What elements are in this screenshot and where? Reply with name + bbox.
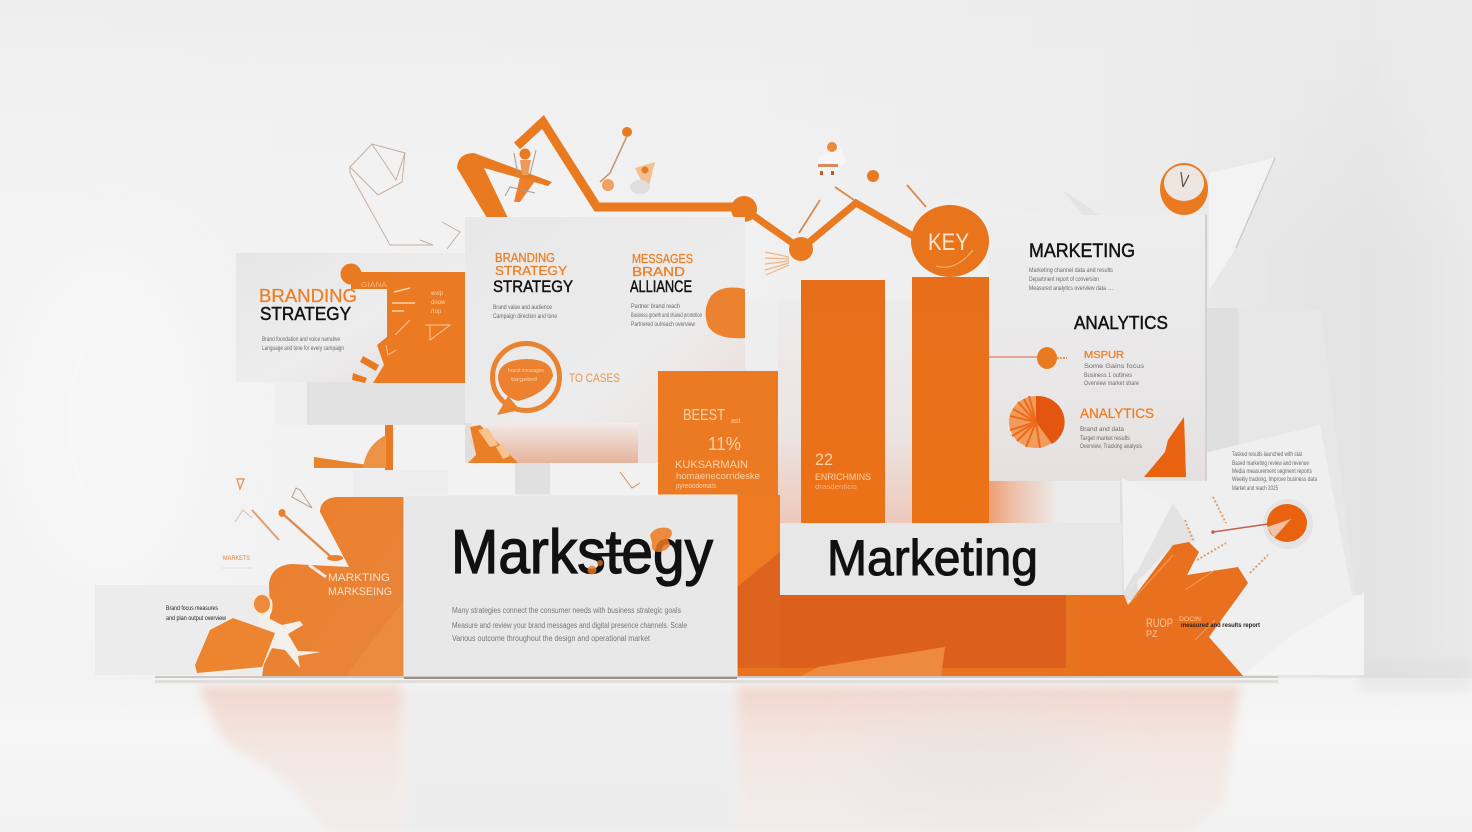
white and grey folded shapes behind arrow bbox=[1122, 478, 1197, 592]
shelf with ribbon bbox=[465, 423, 638, 463]
marketing strategy card bbox=[404, 495, 737, 677]
heading: strategy: STRATEGY bbox=[260, 304, 351, 324]
panel: center strategy card bbox=[465, 217, 745, 463]
panel: branding strategy bbox=[236, 253, 465, 383]
marketing banner: Marketing bbox=[827, 530, 1038, 586]
label: to cases: TO CASES bbox=[569, 373, 620, 385]
orange stat card: BEEST bbox=[683, 407, 725, 424]
panel: marketing analytics: Department report of conversion bbox=[1029, 277, 1099, 283]
panel: center strategy card: Business growth and shared promotion bbox=[631, 313, 702, 319]
marketing strategy card: Measure and review your brand messages and digital presence channels. Scale bbox=[452, 621, 687, 630]
big orange line chart arrow bbox=[457, 122, 915, 249]
orange left figure block: MARKSEING bbox=[328, 586, 392, 598]
soft orange glow beside bars bbox=[988, 478, 1058, 528]
floor with reflections bbox=[0, 660, 1472, 832]
panel: marketing analytics: Target market results bbox=[1080, 436, 1130, 442]
panel: center strategy card: Partnered outreach overview bbox=[631, 322, 696, 328]
panel: center strategy card: ALLIANCE bbox=[630, 278, 692, 296]
left white card with copy bbox=[95, 585, 275, 675]
left white card with copy: and plan output overview bbox=[166, 616, 227, 622]
panel: marketing analytics: Overview, Tracking analysis bbox=[1080, 444, 1142, 450]
white paper sheet copy, right: Weekly tracking, Improve business data bbox=[1232, 477, 1318, 483]
block caption: MARKTING bbox=[328, 572, 390, 584]
figure silhouette bbox=[197, 594, 321, 675]
panel: center strategy card: STRATEGY bbox=[493, 278, 573, 296]
pale column between bars bbox=[778, 300, 912, 525]
heading: marketing: MARKETING bbox=[1029, 241, 1135, 262]
white pedestal blocks bbox=[275, 382, 640, 497]
magnifier badge: targeted bbox=[511, 377, 537, 383]
sub heading: analytics: ANALYTICS bbox=[1080, 406, 1154, 421]
orange arrow shape, lower right: DOCIN bbox=[1179, 617, 1201, 623]
orange blob bbox=[706, 288, 745, 338]
orange stat card: ast bbox=[731, 418, 740, 425]
orange arrow shape, lower right: PZ bbox=[1146, 629, 1158, 639]
panel: center strategy card: Brand value and audience bbox=[493, 305, 553, 311]
panel: marketing analytics: Measured analytics overview data .... bbox=[1029, 286, 1113, 292]
marketing strategy card: Various outcome throughout the design and operational market bbox=[452, 634, 651, 643]
white paper sheet copy, right: Media measurement segment reports bbox=[1232, 469, 1312, 475]
marketing banner bbox=[780, 523, 1122, 595]
orange pole and base under branding panel bbox=[314, 380, 465, 470]
heading: branding strategy: BRANDING bbox=[495, 250, 555, 265]
white paper sheet copy, right bbox=[1232, 452, 1318, 492]
panel: center strategy card: Partner brand reach bbox=[631, 304, 680, 310]
orange left figure block bbox=[195, 497, 404, 677]
orange base block bbox=[737, 495, 1079, 677]
orange illustration side panel bbox=[340, 264, 465, 383]
connector node bbox=[988, 347, 1067, 369]
big heading: Markstegy bbox=[451, 518, 713, 587]
small tag card: MARKETS bbox=[223, 556, 250, 562]
bar chart bbox=[801, 277, 989, 525]
panel: center strategy card: STRATEGY bbox=[495, 263, 567, 278]
gauge dial bbox=[1211, 499, 1313, 549]
orange triangle bbox=[1144, 417, 1186, 477]
small tag card bbox=[216, 540, 256, 577]
panel: marketing analytics: Marketing channel data and results bbox=[1029, 268, 1113, 274]
panel: marketing analytics: Overview market share bbox=[1084, 381, 1140, 387]
white paper sheet copy, right: Tasked results launched with stat bbox=[1232, 452, 1302, 458]
orange stat card: KUKSARMAIN bbox=[675, 459, 748, 471]
orange stat card: 11% bbox=[708, 434, 741, 454]
bar 1 bbox=[801, 280, 885, 525]
panel: branding strategy: Language and tone for every campaign bbox=[262, 346, 344, 352]
panel: marketing analytics: Business 1 outlines bbox=[1084, 373, 1132, 379]
thin line sketch, upper left bbox=[350, 144, 460, 249]
heading: branding: BRANDING bbox=[259, 286, 357, 306]
white paper sheet copy, right: Based marketing review and revenue bbox=[1232, 461, 1310, 467]
orange stat card bbox=[658, 371, 778, 511]
panel: center strategy card: Campaign direction and tone bbox=[493, 314, 558, 320]
bar 2 bbox=[912, 277, 989, 525]
orange illustration side panel: dnow bbox=[431, 300, 446, 306]
small pins and sticks, lower left bbox=[235, 479, 343, 577]
white paper sheet copy, right: Market and reach 2025 bbox=[1232, 486, 1278, 492]
heading: message alliance: MESSAGES bbox=[632, 251, 693, 266]
line chart node circles bbox=[731, 170, 879, 261]
orange arrow shape, lower right: measured and results report bbox=[1181, 623, 1260, 629]
clock icon bbox=[1160, 163, 1208, 215]
heading: analytics: ANALYTICS bbox=[1074, 313, 1168, 333]
orange stat card: pyreoodomais bbox=[676, 483, 716, 490]
panel: marketing analytics: Some Gains focus bbox=[1084, 364, 1144, 370]
block caption: RUOP bbox=[1146, 616, 1173, 630]
key badge: KEY bbox=[928, 229, 969, 256]
panel: center strategy card: BRAND bbox=[632, 264, 685, 279]
floor shelf line bbox=[155, 676, 1278, 683]
orange stat card: homaenecorrideske bbox=[676, 471, 760, 481]
key badge bbox=[911, 205, 989, 277]
magnifier badge bbox=[492, 344, 560, 415]
left white card with copy: Brand focus measures bbox=[166, 606, 218, 612]
bar 1: 22 bbox=[815, 450, 833, 469]
figure orange torso bbox=[195, 618, 275, 673]
small copy: Brand foundation and voice narrative bbox=[262, 337, 341, 343]
metric text: MSPUR bbox=[1084, 350, 1124, 361]
orange arrow shape, lower right bbox=[1079, 497, 1268, 677]
orange illustration side panel: wvip bbox=[430, 291, 444, 297]
orange illustration side panel: GIANA bbox=[361, 282, 387, 289]
small floating figures above chart bbox=[505, 127, 926, 275]
pie chart bbox=[1009, 396, 1065, 448]
orange illustration side panel: rtop bbox=[431, 309, 442, 315]
body copy: Many strategies connect the consumer needs with business strategic goals bbox=[452, 606, 681, 615]
panel: marketing analytics bbox=[988, 215, 1207, 481]
panel: marketing analytics: Brand and data bbox=[1080, 427, 1125, 433]
bar 1: ENRICHMINS bbox=[815, 472, 871, 482]
strike and splash bbox=[588, 528, 672, 574]
grey back blocks, right bbox=[745, 158, 1364, 675]
magnifier badge: brand messages bbox=[508, 368, 544, 374]
bar 1: drasdenticis bbox=[815, 484, 858, 491]
